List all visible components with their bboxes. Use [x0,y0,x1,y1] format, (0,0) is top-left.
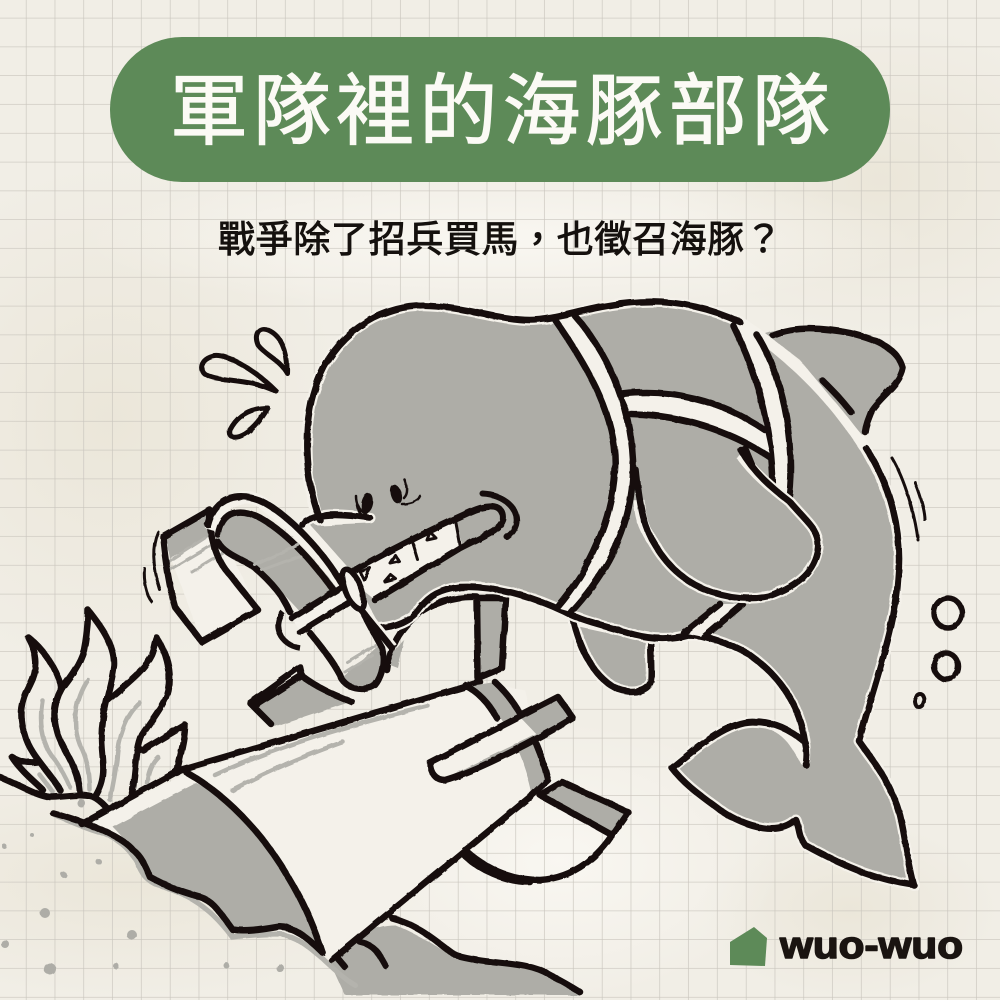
snout [303,515,370,525]
sonar dish [430,697,573,782]
subtitle: 戰爭除了招兵買馬，也徵召海豚？ [218,219,782,260]
dolphin body [303,302,914,885]
dorsal fin [765,326,904,445]
flipper [636,448,818,598]
dolphin pectoral fin [573,620,651,692]
motion lines [144,458,925,602]
lower bracket [252,677,350,727]
rod [292,585,352,632]
title text: 軍隊裡的海豚部隊 [170,67,830,155]
hull outline [55,815,355,985]
lower ring [343,645,382,689]
sweat drops [202,329,287,437]
logo [730,925,963,967]
ground bottom right [330,918,580,995]
sediment dots [1,833,284,975]
stern strip [465,682,548,795]
dorsal mast [387,597,506,678]
bubbles [915,598,962,708]
submarine hull [53,682,545,985]
harness straps [555,316,791,637]
eyes [356,480,420,518]
gun device [163,497,392,727]
nozzle [338,567,368,611]
seaweed [0,610,185,808]
tail fin [465,782,628,882]
logo icon: house [730,927,767,966]
mouth [343,494,517,600]
hook [218,515,340,612]
logo wordmark: wuo-wuo [779,925,963,967]
illustration [0,302,962,995]
gun barrel block [163,510,258,642]
title banner [110,37,890,182]
